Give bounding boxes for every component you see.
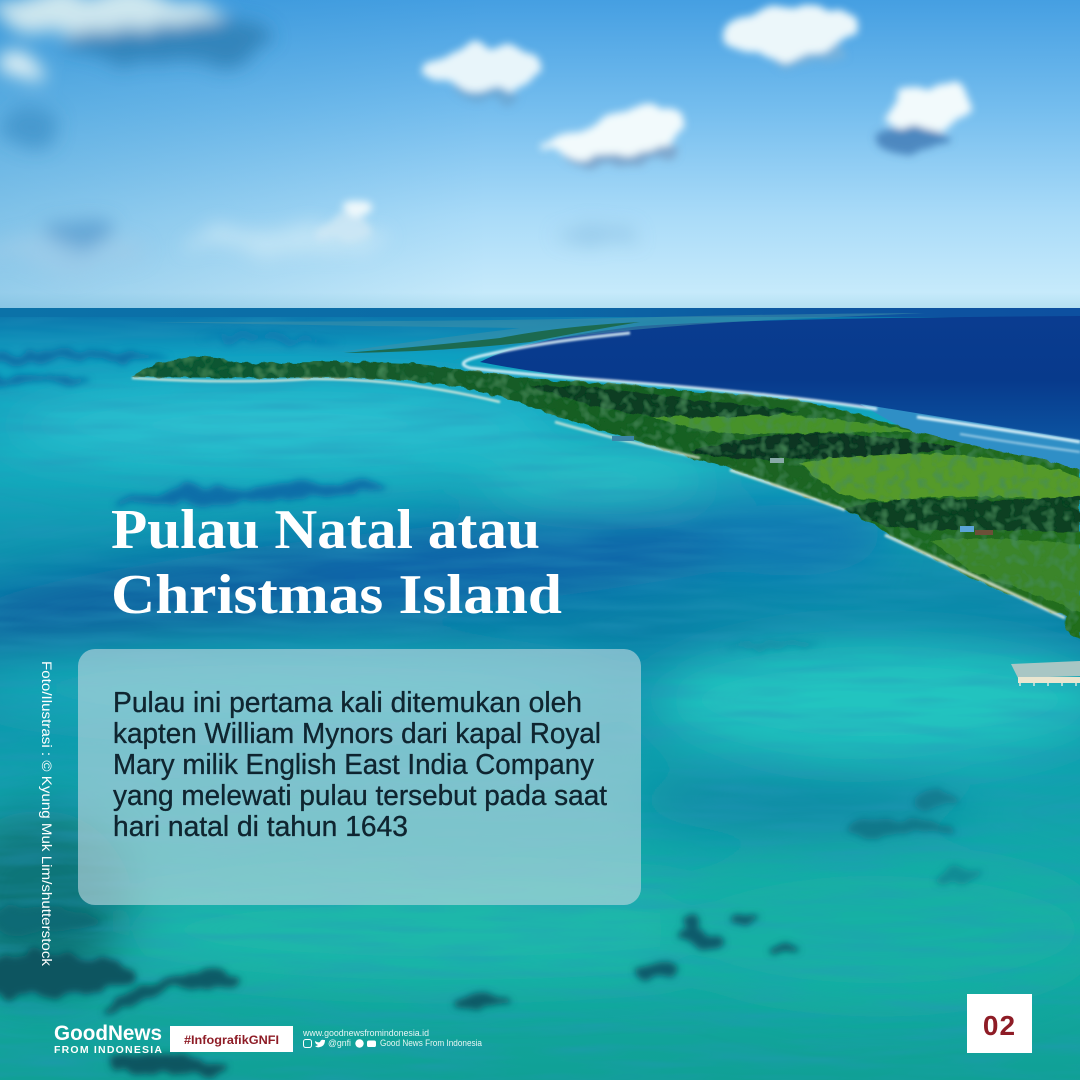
footer: website and social handles	[302, 1028, 482, 1048]
pier	[1011, 661, 1080, 686]
sunlit canopy	[640, 411, 915, 434]
horizon strip	[0, 308, 1080, 317]
island	[132, 357, 1080, 640]
body text: Mary milik English East India Company	[113, 749, 594, 781]
beach	[132, 378, 1065, 618]
title	[111, 499, 562, 626]
lagoon light patches	[0, 391, 1080, 1000]
footer: brand logo: FROM INDONESIA	[54, 1044, 162, 1056]
sea	[0, 308, 1080, 1080]
icon: facebook	[355, 1039, 364, 1048]
title: Christmas Island	[111, 564, 562, 626]
title: Pulau Natal atau	[111, 499, 540, 561]
body text: yang melewati pulau tersebut pada saat	[113, 780, 607, 812]
body text: hari natal di tahun 1643	[113, 811, 408, 843]
body text: Pulau ini pertama kali ditemukan oleh	[113, 687, 582, 719]
body text	[113, 687, 607, 843]
footer: website and social handles: www.goodnewsfromindonesia.id	[302, 1028, 429, 1038]
photo credit: Foto/Ilustrasi : © Kyung Muk Lim/shutterstock	[39, 661, 54, 966]
footer: brand logo	[54, 1022, 162, 1056]
footer: website and social handles: @gnfi	[328, 1038, 351, 1048]
water ripples	[0, 308, 1080, 1080]
icon: instagram	[304, 1040, 312, 1048]
footer: hashtag badge: #InfografikGNFI	[184, 1033, 279, 1047]
footer: website and social handles: Good News From Indonesia	[380, 1038, 482, 1048]
panel: description text box	[78, 649, 641, 905]
deep ocean	[480, 316, 1080, 444]
surf zone	[860, 404, 1080, 472]
footer: hashtag badge	[170, 1026, 293, 1052]
far atoll strip	[150, 313, 925, 362]
tree shadow	[690, 433, 960, 459]
page number	[967, 994, 1032, 1053]
houses	[612, 436, 993, 535]
reef surf	[463, 333, 1080, 452]
footer: brand logo: GoodNews	[54, 1022, 162, 1045]
icon: youtube	[367, 1040, 376, 1047]
body text: kapten William Mynors dari kapal Royal	[113, 718, 601, 750]
page number: 02	[983, 1010, 1016, 1041]
sky	[0, 0, 1080, 308]
icon: twitter	[315, 1040, 325, 1047]
